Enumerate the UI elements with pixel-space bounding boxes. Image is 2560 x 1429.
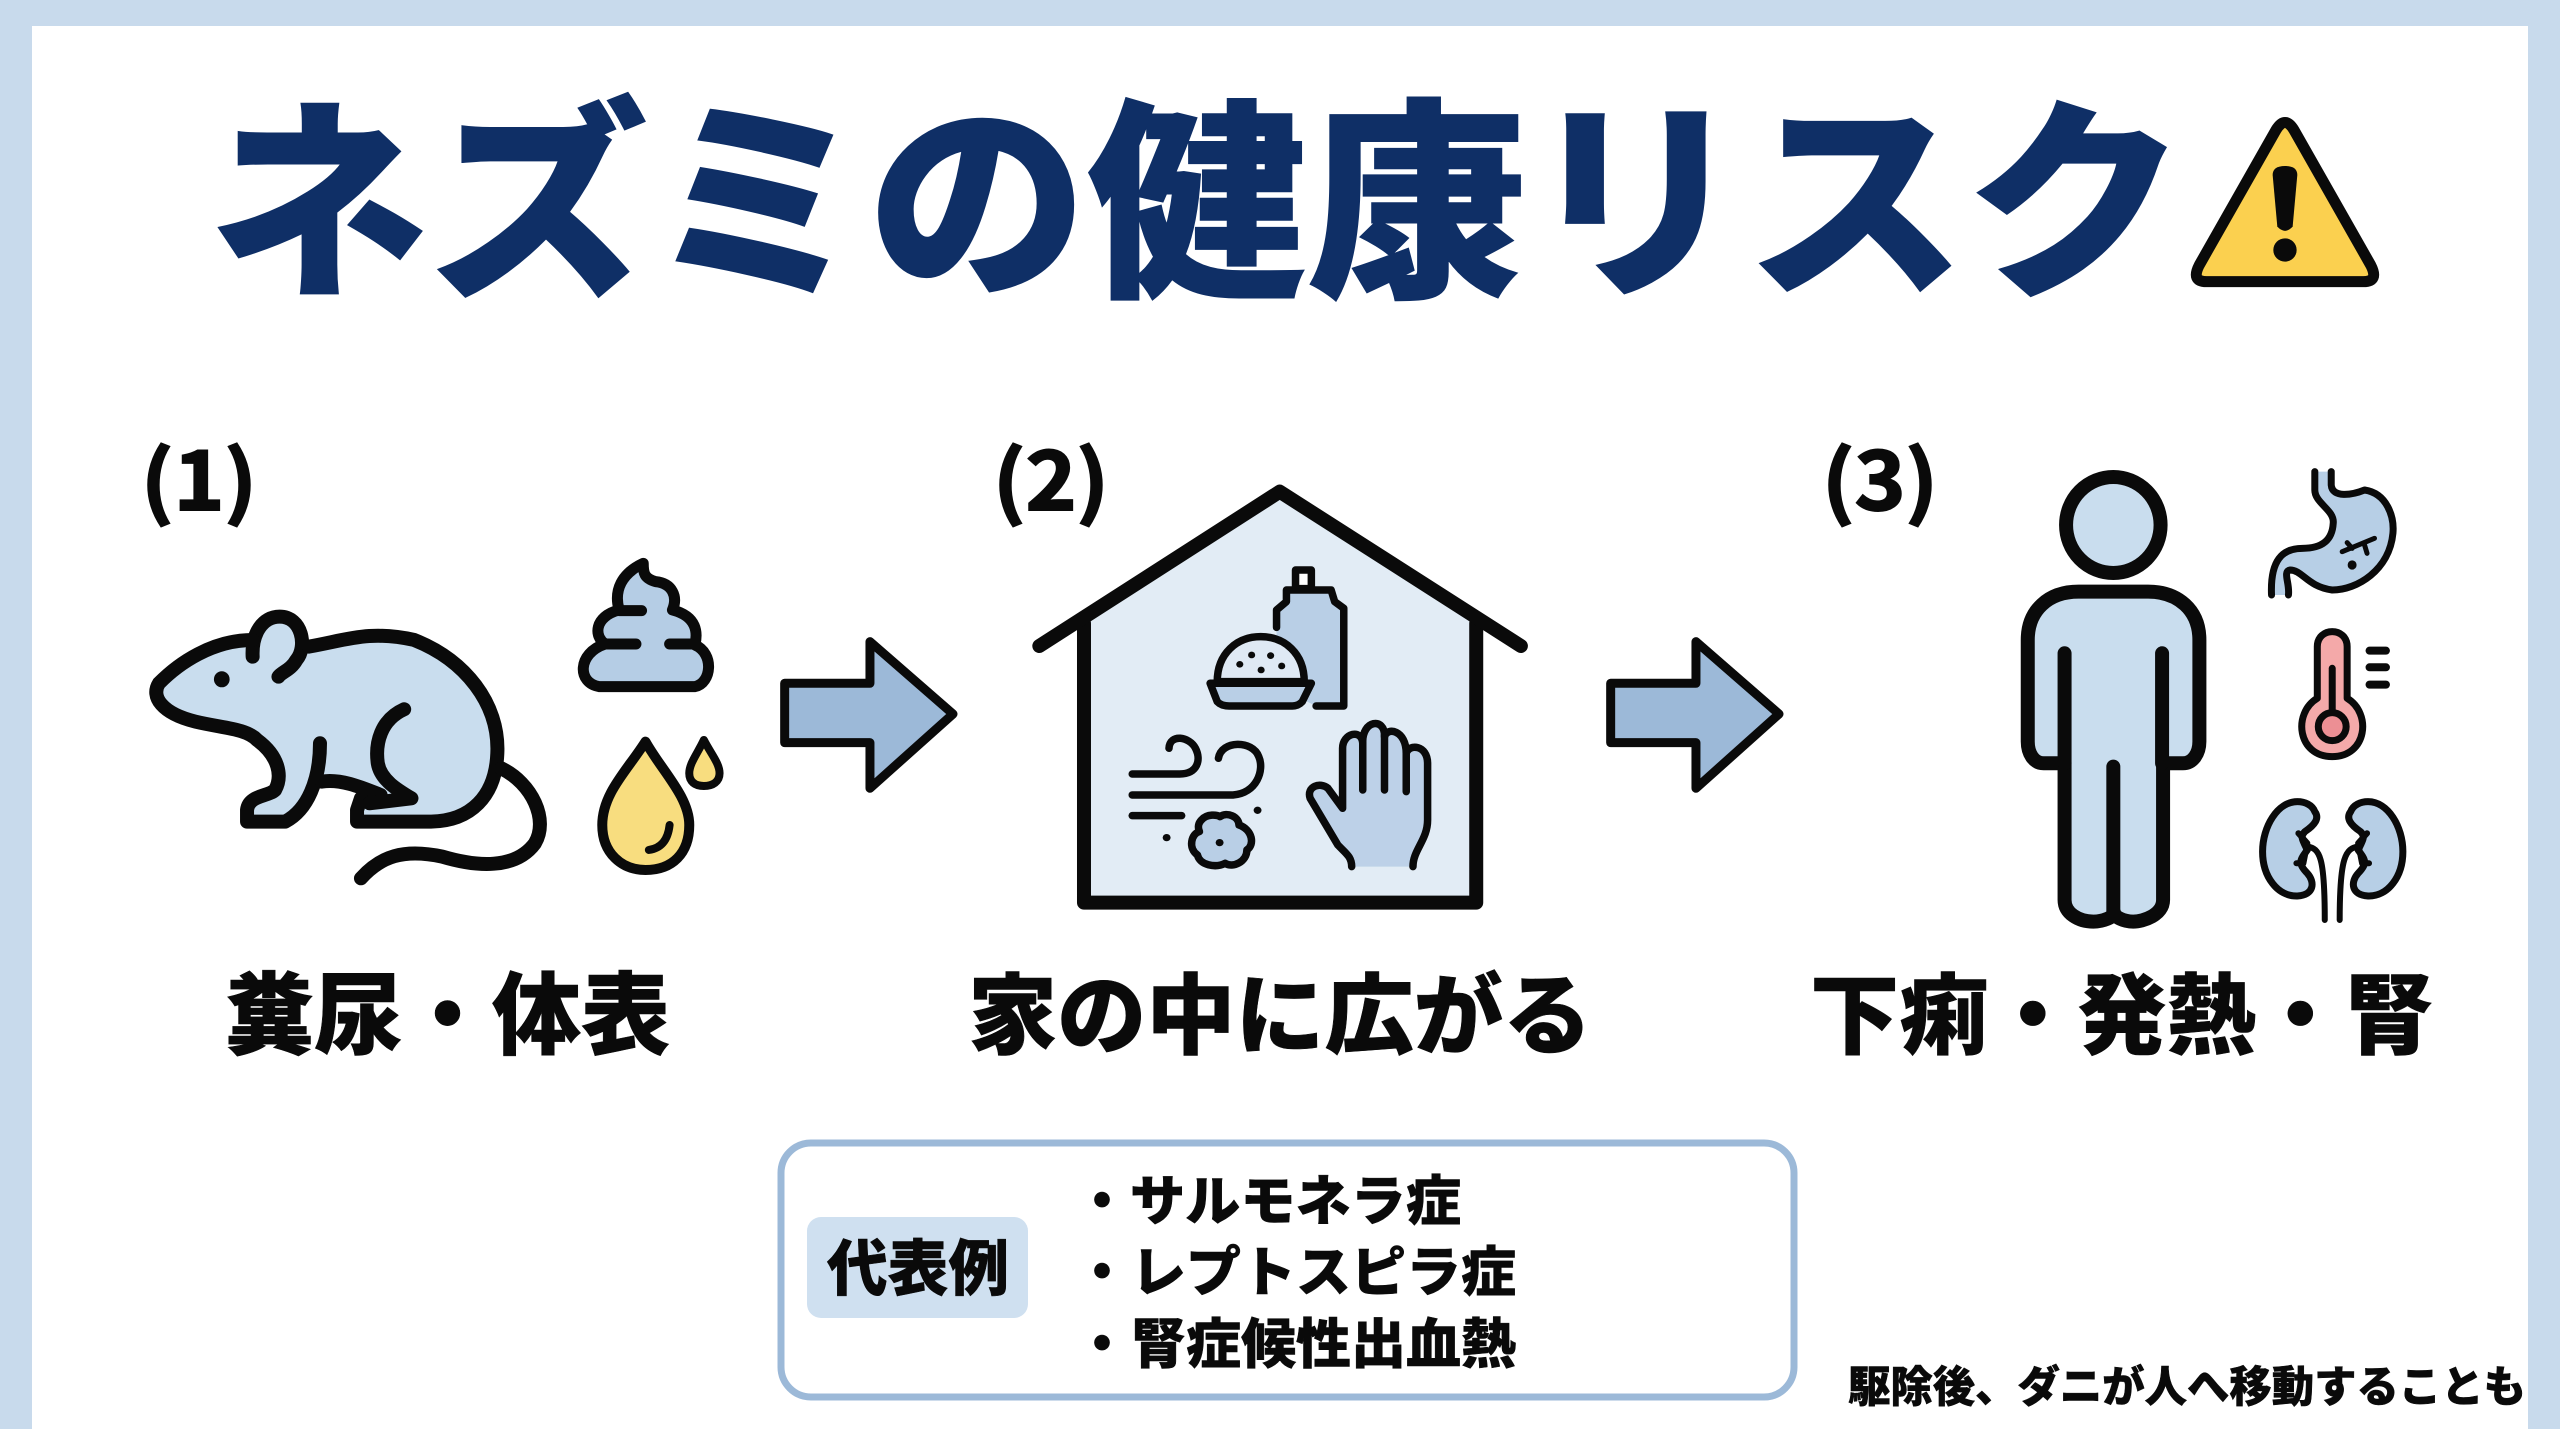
label: spreads inside the home: 家の中に広がる	[968, 967, 1592, 1066]
disease list: レプトスピラ症	[1131, 1243, 1516, 1303]
icon: house with contaminated items	[1039, 492, 1521, 903]
disease list	[1075, 1172, 1516, 1375]
disease list: サルモネラ症	[1130, 1172, 1461, 1232]
airborne dust	[1132, 738, 1262, 866]
arrow: step 2 to step 3	[1611, 642, 1779, 788]
step 3 number: (3)	[1822, 418, 1938, 534]
disease list: ・	[1075, 1172, 1129, 1232]
tag: representative examples: 代表例	[827, 1235, 1009, 1303]
icon: kidneys	[2263, 802, 2403, 920]
title: ネズミの健康リスク	[209, 87, 2185, 326]
icon: person	[2028, 477, 2199, 922]
label: diarrhea, fever, kidney: 下痢・発熱・腎	[1810, 967, 2434, 1066]
hand	[1309, 724, 1428, 867]
icon: rat	[156, 617, 540, 878]
icon: warning triangle	[2196, 122, 2374, 282]
label: droppings, urine, body surface: 糞尿・体表	[225, 967, 670, 1067]
disease list: ・	[1075, 1315, 1129, 1375]
tag: representative examples	[807, 1217, 1028, 1318]
icon: droppings	[583, 563, 709, 687]
icon: urine drops	[602, 740, 720, 870]
disease list: ・	[1075, 1243, 1129, 1303]
panel: representative examples	[781, 1143, 1794, 1397]
disease list: 腎症候性出血熱	[1131, 1315, 1516, 1375]
step 2 number: (2)	[993, 418, 1109, 534]
icon: stomach	[2271, 472, 2393, 595]
icon: thermometer	[2302, 632, 2386, 757]
spray bottle	[1277, 570, 1344, 706]
step 1 number: (1)	[141, 418, 257, 534]
food bowl	[1210, 637, 1311, 706]
arrow: step 1 to step 2	[785, 642, 953, 788]
footnote: 駆除後、ダニが人へ移動することも	[1848, 1363, 2526, 1412]
